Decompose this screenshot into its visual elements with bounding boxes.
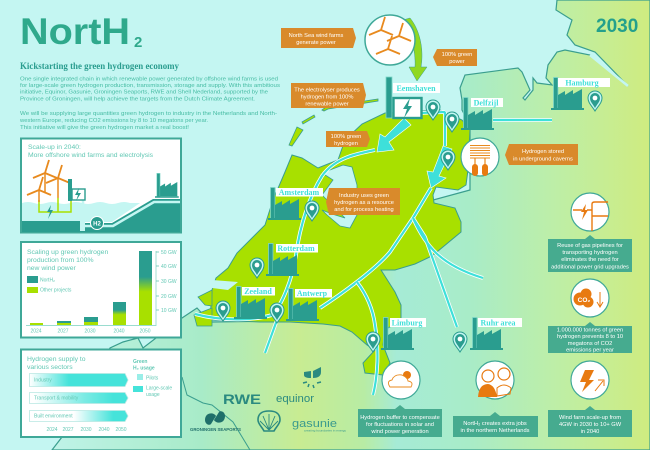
factory: Delfzijl xyxy=(461,98,494,130)
supply legend xyxy=(133,359,172,398)
hydrogen pipelines xyxy=(195,112,552,395)
icon: electrolyser xyxy=(68,179,85,201)
pin xyxy=(366,332,380,352)
chart title: new wind power xyxy=(27,265,76,272)
pin xyxy=(588,91,602,111)
icon: CO2 circle: CO₂ xyxy=(578,297,590,304)
factory: Amsterdam xyxy=(268,188,301,220)
callout: industry: and for process heating xyxy=(334,207,394,213)
info box: CO2: emissions per year xyxy=(566,348,614,354)
icon: pipeline circle xyxy=(571,193,609,231)
icon: factory xyxy=(155,173,179,198)
chart title: production from 100% xyxy=(27,257,94,264)
city labels: Limburg xyxy=(392,318,422,328)
info box: wind scale-up xyxy=(548,406,632,437)
logo: Shell xyxy=(258,411,280,431)
factory: Ruhr area xyxy=(470,318,503,350)
supply legend: H₂ usage xyxy=(133,366,155,372)
supply years: 2024 xyxy=(46,427,58,433)
supply years: 2040 xyxy=(98,427,110,433)
map: Netherlands xyxy=(194,99,470,375)
info box: CO2 xyxy=(548,322,632,354)
map: Wadden islands xyxy=(289,99,378,146)
arrow: hydrogen to west xyxy=(377,118,411,152)
map: Zeeland islands xyxy=(194,290,212,326)
icon: people circle xyxy=(476,361,514,399)
chart legend: Other projects xyxy=(40,288,72,294)
callout: stored in caverns xyxy=(505,144,578,165)
panel: scale-up in 2040: More offshore wind farms and electrolysis xyxy=(28,152,154,159)
year label: 2030 xyxy=(596,16,638,37)
callout: electrolyser: renewable power xyxy=(305,102,349,108)
city labels: Delfzijl xyxy=(474,98,499,108)
callout: electrolyser: hydrogen from 100% xyxy=(301,94,353,100)
logo: NortH2 title: NortH xyxy=(20,11,130,52)
icon: power scale-up circle xyxy=(571,361,609,399)
logo: Groningen Seaports xyxy=(190,411,241,432)
info box: wind scale-up: Wind farm scale-up from xyxy=(559,415,621,421)
info box: buffer: Hydrogen buffer to compensate xyxy=(360,415,440,421)
info box: CO2: hydrogen prevents 8 to 10 xyxy=(557,334,623,340)
factory: Hamburg xyxy=(551,78,584,110)
city labels: Amsterdam xyxy=(279,188,320,197)
callout: wind farms: North Sea wind farms xyxy=(289,33,343,39)
callout: green hydrogen: 100% green xyxy=(331,134,361,140)
intro text: initiative, Equinor, Gasunie, Groningen Seaports, RWE and Shell Nederland, supported by the xyxy=(20,90,269,96)
panel: scale-up in 2040 xyxy=(21,138,181,232)
info box: wind scale-up: 4GW in 2030 to 10+ GW xyxy=(559,422,622,428)
bar chart: 10 GW xyxy=(161,308,177,314)
icon: cloud and sun circle xyxy=(382,361,420,399)
info box: gas pipelines: Reuse of gas pipelines for xyxy=(557,243,623,249)
bar chart: 40 GW xyxy=(161,264,177,270)
icon: H2 blob: H2 xyxy=(93,222,101,228)
intro text: western Europe, reducing CO2 emissions by 8 to 10 megatons per year. xyxy=(19,118,208,124)
icon: CO2 circle xyxy=(571,279,609,317)
sector arrows: Industry xyxy=(34,378,52,384)
heading: Kickstarting the green hydrogen economy xyxy=(20,61,179,71)
callout: green power: power xyxy=(449,59,465,65)
panel: scale-up in 2040: Scale-up in 2040: xyxy=(28,144,81,151)
factory: Limburg xyxy=(381,318,414,350)
info box: CO2: 1.000.000 tonnes of green xyxy=(557,328,623,334)
arrow: hydrogen to south xyxy=(427,146,452,188)
bar chart: 50 GW xyxy=(161,250,177,256)
supply legend: Pilots xyxy=(146,376,159,382)
map: Belgium border xyxy=(182,377,250,450)
city labels: Ruhr area xyxy=(480,318,516,328)
intro text: Province of Groningen, will help achieve the targets from the Dutch Climate Agreement. xyxy=(20,96,255,102)
panel: scaling up chart xyxy=(21,242,181,338)
icon: turbines xyxy=(27,160,70,202)
callout: green hydrogen: hydrogen xyxy=(334,141,358,147)
map: Elbe river xyxy=(590,55,628,86)
factory: Zeeland xyxy=(234,286,267,319)
info box: buffer xyxy=(358,405,442,437)
icon: lightning xyxy=(47,205,53,219)
chart title xyxy=(27,249,108,272)
callout: industry: Industry uses green xyxy=(339,193,389,199)
city labels xyxy=(242,78,610,328)
intro text: for large-scale green hydrogen production, transmission, storage and supply. With this ambitious xyxy=(20,83,280,89)
bar chart: 2027 xyxy=(57,328,69,334)
supply years xyxy=(46,427,127,433)
callout: green power xyxy=(433,49,477,66)
pin xyxy=(270,303,284,323)
intro text xyxy=(19,76,280,131)
supply years: 2030 xyxy=(80,427,92,433)
supply legend: Green xyxy=(133,359,147,365)
bar chart: 2050 xyxy=(139,328,151,334)
callout: wind farms xyxy=(281,28,356,48)
info box: jobs xyxy=(453,412,538,437)
logo: Groningen Seaports: GRONINGEN SEAPORTS xyxy=(190,427,241,432)
info box: gas pipelines: additional power grid upgrades xyxy=(551,264,629,270)
logo: Equinor: equinor xyxy=(276,393,314,405)
sector arrows xyxy=(30,374,128,422)
info box: CO2: megatons of CO2 xyxy=(568,341,612,347)
supply years: 2050 xyxy=(115,427,127,433)
pin xyxy=(250,258,264,278)
bar chart: 30 GW xyxy=(161,279,177,285)
city labels: Rotterdam xyxy=(277,244,315,253)
sector arrows: Transport & mobility xyxy=(34,396,79,402)
callout: green hydrogen xyxy=(326,131,370,147)
icon: Eemshaven electrolyser xyxy=(386,77,422,118)
logo: Gasunie: gasunie xyxy=(292,418,337,430)
callout: electrolyser xyxy=(291,83,366,108)
city labels: Hamburg xyxy=(565,78,599,88)
callout: industry xyxy=(326,188,400,215)
info box: buffer: for fluctuations in solar and xyxy=(366,422,434,428)
pin xyxy=(426,100,440,120)
info box: gas pipelines xyxy=(548,235,632,272)
bar chart xyxy=(26,250,177,334)
icon: wind farm circle xyxy=(365,15,415,65)
chart legend xyxy=(27,276,72,294)
intro text: This initiative will give the green hydrogen market a real boost! xyxy=(20,125,189,131)
supply title xyxy=(27,356,86,371)
supply legend: Large-scale xyxy=(146,386,172,392)
bar chart: 2024 xyxy=(30,328,42,334)
icon: H2 blob xyxy=(90,216,104,230)
pin xyxy=(441,150,455,170)
info box: gas pipelines: transporting hydrogen xyxy=(562,250,618,256)
sector arrows: Built environment xyxy=(34,414,73,420)
map: IJsselmeer xyxy=(322,165,357,228)
info box: wind scale-up: in 2040 xyxy=(581,429,599,435)
intro text: We will be supplying large quantities green hydrogen to industry in the Netherlands and North- xyxy=(20,111,277,117)
factory: Antwerp xyxy=(286,288,319,321)
logo: Equinor xyxy=(276,367,321,405)
pin xyxy=(453,332,467,352)
logo: Gasunie: creating boundaries in energy xyxy=(304,428,347,432)
panel: hydrogen supply xyxy=(21,350,181,437)
supply title: Hydrogen supply to xyxy=(27,356,86,363)
city labels: Antwerp xyxy=(297,289,328,298)
supply legend: usage xyxy=(146,392,160,398)
factory: Rotterdam xyxy=(266,244,299,276)
bar chart: 2030 xyxy=(84,328,96,334)
callout: electrolyser: The electrolyser produces xyxy=(294,88,360,94)
intro text: One single integrated chain in which renewable power generated by offshore wind farms is used xyxy=(20,76,278,82)
bar chart: 20 GW xyxy=(161,294,177,300)
callout: stored in caverns: in underground caverns xyxy=(513,156,573,162)
factories and pins xyxy=(216,77,602,352)
arrow: green power xyxy=(403,18,427,81)
pin xyxy=(305,201,319,221)
city labels: Zeeland xyxy=(244,287,272,296)
chart legend: NortH₂ xyxy=(40,278,55,284)
logo: NortH2 title: 2 xyxy=(134,34,142,51)
bar chart: 2040 xyxy=(113,328,125,334)
icon: caverns circle xyxy=(461,138,499,176)
logo: Gasunie xyxy=(292,418,347,432)
city labels: Eemshaven xyxy=(396,84,436,93)
info box: jobs: NortH₂ creates extra jobs xyxy=(463,421,527,427)
supply years: 2027 xyxy=(62,427,74,433)
chart title: Scaling up green hydrogen xyxy=(27,249,108,256)
info box: jobs: in the northern Netherlands xyxy=(461,428,530,434)
callout: wind farms: generate power xyxy=(296,40,336,46)
pin xyxy=(445,112,459,132)
info box: buffer: wind power generation xyxy=(370,429,429,435)
logo: RWE: RWE xyxy=(223,391,261,407)
pin xyxy=(216,301,230,321)
supply title: various sectors xyxy=(27,364,73,371)
map: Zeeland inlet xyxy=(212,280,238,290)
callout: industry: hydrogen as a resource xyxy=(334,200,394,206)
callout: stored in caverns: Hydrogen stored xyxy=(522,149,564,155)
callout: green power: 100% green xyxy=(442,52,472,58)
info box: gas pipelines: eliminates the need for xyxy=(561,257,619,263)
